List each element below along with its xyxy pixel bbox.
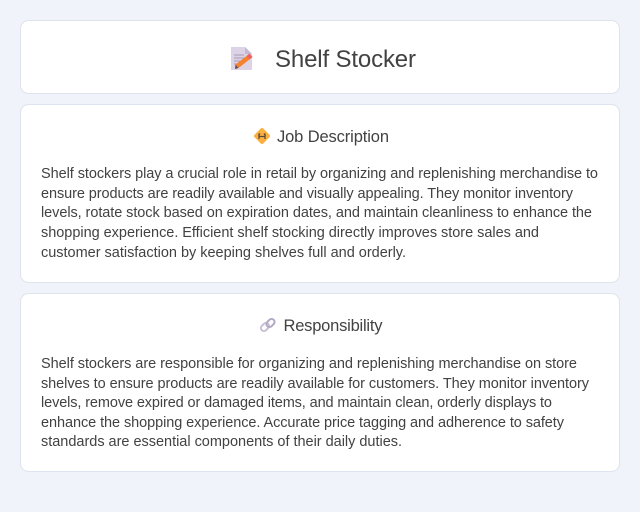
- text block: job description: customer satisfaction by keeping shelves full and orderly.: [41, 245, 406, 261]
- text block: responsibility: Shelf stockers are responsible for organizing and replenishing merchandise on store: [41, 356, 577, 372]
- text block: responsibility: [41, 356, 590, 450]
- text block: responsibility: shelves to ensure products are readily available for customers. They monitor inventory: [41, 376, 590, 392]
- icon: chain link: [260, 318, 276, 332]
- text block: job description: [41, 166, 598, 261]
- text block: responsibility: levels, remove expired or damaged items, and maintain clean, orderly displays to: [41, 395, 552, 411]
- panel: job description: [20, 104, 620, 282]
- icon: document with pencil: [231, 47, 252, 70]
- heading: job description: Job Description: [277, 128, 389, 146]
- text block: job description: levels, rotate stock based on expiration dates, and maintain cleanliness to enhance the: [41, 205, 592, 221]
- heading: responsibility: Responsibility: [284, 317, 383, 335]
- text block: responsibility: enhance the shopping experience. Accurate price tagging and adherence to safety: [41, 415, 565, 431]
- text block: responsibility: standards are essential components of their daily duties.: [41, 434, 402, 450]
- title: Shelf Stocker: [275, 46, 416, 73]
- icon: construction diamond sign: [253, 127, 271, 145]
- panel: responsibility: [20, 294, 620, 472]
- text block: job description: shopping experience. Efficient shelf stocking directly improves store sales and: [41, 225, 539, 241]
- panel: title card: [20, 20, 620, 94]
- text block: job description: ensure products are readily available and visually appealing. They monitor inventory: [41, 186, 574, 202]
- text block: job description: Shelf stockers play a crucial role in retail by organizing and replenishing merchandise to: [41, 166, 598, 182]
